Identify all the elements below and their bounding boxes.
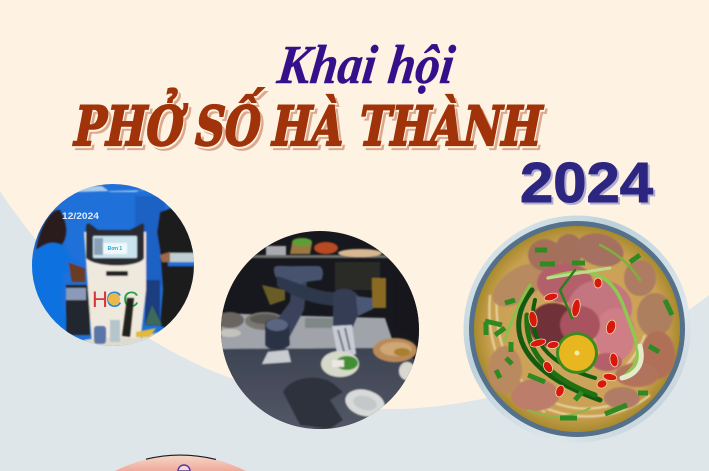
robot base plate bbox=[262, 350, 291, 364]
robot lower link bbox=[278, 281, 308, 337]
title gap layer: PHỞ bbox=[69, 91, 192, 160]
robot base joint bbox=[265, 319, 290, 350]
bowl rim bbox=[464, 216, 690, 442]
HCC logo: C bbox=[106, 287, 122, 312]
year 2024: 2024 bbox=[522, 153, 655, 217]
scallions bbox=[505, 245, 641, 417]
photo: robot arm cooking pho bbox=[216, 231, 419, 429]
lime slice bbox=[556, 332, 598, 374]
broth bbox=[474, 226, 680, 432]
bowl under gripper bbox=[321, 351, 359, 377]
title shadow layer: HÀ bbox=[269, 98, 353, 162]
table behind robot bbox=[66, 285, 90, 335]
photo: serving robot bbox=[32, 184, 198, 350]
title main layer: PHỞ bbox=[68, 89, 191, 158]
illustration: bowl of pho bbox=[464, 216, 690, 442]
title main layer: SỐ bbox=[189, 88, 268, 158]
partial circle at bottom edge bbox=[115, 455, 246, 471]
robot forearm bbox=[277, 276, 340, 306]
chili slices bbox=[528, 278, 619, 398]
steel counter bbox=[221, 313, 395, 349]
title main layer: HÀ bbox=[266, 94, 350, 158]
backdrop date text: 12/2024 bbox=[62, 211, 100, 222]
HCC logo: C bbox=[123, 287, 139, 312]
HCC logo bbox=[94, 292, 138, 307]
backdrop top band bbox=[78, 186, 150, 192]
robot wrist bbox=[333, 289, 358, 327]
man in black bbox=[157, 208, 194, 345]
foil gripper bbox=[332, 325, 356, 358]
woman in blue dress bbox=[32, 242, 86, 332]
dark table bbox=[221, 348, 419, 429]
title: Phở số Hà Thành bbox=[68, 88, 551, 162]
title gap layer: THÀNH bbox=[354, 96, 549, 160]
robot screen bbox=[93, 236, 137, 258]
chopped scallion pieces bbox=[485, 250, 672, 418]
title main layer bbox=[68, 88, 548, 158]
beef slices, centre pink bbox=[537, 263, 593, 303]
robot screen label: Đơn 1 bbox=[108, 246, 122, 252]
title shadow layer: THÀNH bbox=[356, 98, 551, 162]
title main layer: THÀNH bbox=[353, 94, 548, 158]
patterned plate bbox=[344, 388, 386, 418]
wicker basket bbox=[373, 338, 417, 362]
title gap layer: HÀ bbox=[267, 96, 351, 160]
title shadow layer: PHỞ bbox=[71, 93, 194, 162]
metal pots bbox=[216, 312, 244, 328]
robot upper elbow bbox=[273, 265, 324, 284]
title: Khai hội: Khai hội bbox=[274, 34, 459, 95]
title shadow layer: SỐ bbox=[192, 92, 271, 162]
title gap layer: SỐ bbox=[190, 90, 269, 160]
year 2024: 2024 bbox=[520, 151, 653, 215]
background: grey curved shape bbox=[0, 191, 709, 471]
robot head bbox=[86, 223, 144, 266]
title gap layer bbox=[69, 90, 549, 160]
noodles bbox=[489, 295, 650, 416]
robot body bbox=[84, 232, 146, 345]
shelf with ingredients bbox=[250, 255, 390, 258]
HCC logo: H bbox=[92, 287, 108, 312]
beef slices, outer bbox=[485, 228, 675, 411]
tabletop glasses and chopsticks bbox=[82, 297, 162, 346]
background cabinet bbox=[335, 262, 380, 290]
title shadow layer bbox=[71, 92, 551, 162]
small purple emblem bbox=[178, 465, 190, 471]
side bowl bbox=[399, 362, 415, 380]
